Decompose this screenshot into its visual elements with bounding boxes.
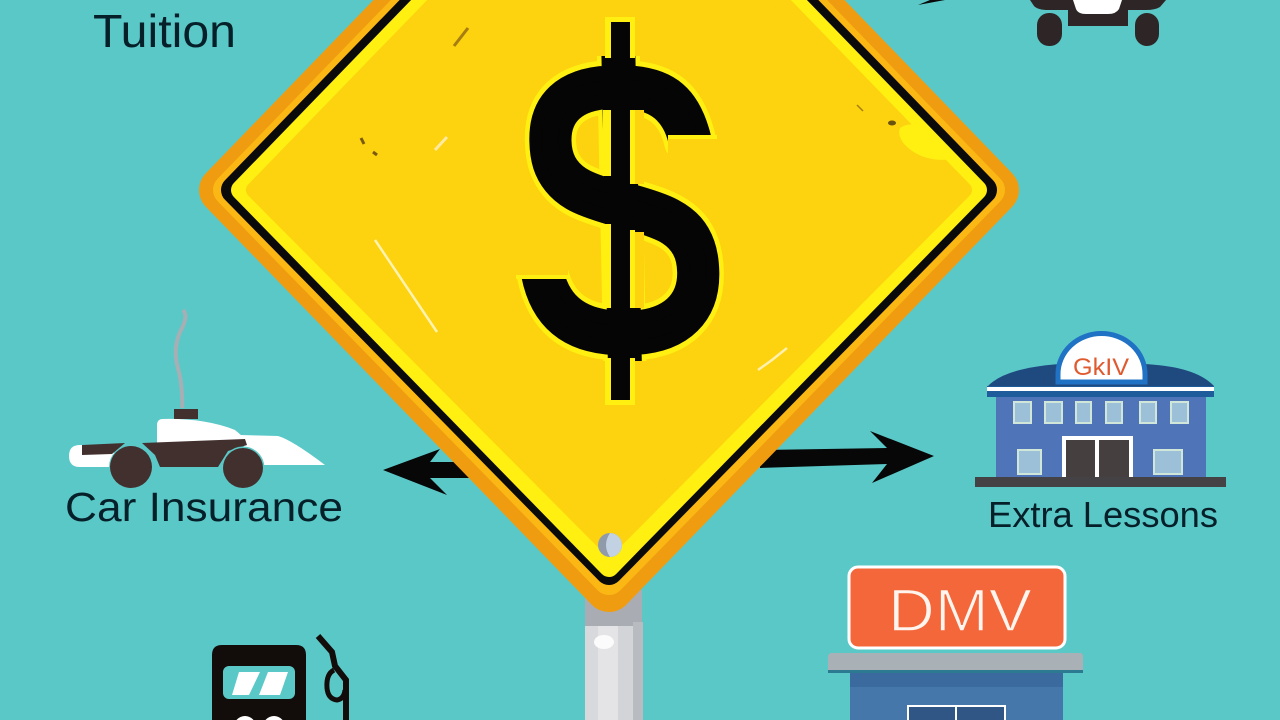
car nose white [240, 435, 325, 465]
sign border: black line [235, 0, 983, 571]
sign face [254, 0, 964, 547]
pump screen [223, 666, 295, 699]
scratches and wear marks [361, 28, 958, 370]
icon: gas pump [212, 636, 346, 720]
base [975, 477, 1226, 487]
building window [908, 706, 1005, 720]
arch sign [1058, 334, 1145, 382]
sign bolt [598, 533, 622, 557]
upper windows [1014, 402, 1188, 474]
building wall [850, 673, 1063, 720]
warning sign with dollar symbol [223, 0, 995, 588]
pump buttons [234, 716, 256, 720]
sign border: thin yellow [229, 0, 989, 579]
dark strip [82, 443, 125, 455]
door [1062, 436, 1133, 478]
pump body [212, 645, 306, 720]
roof [988, 364, 1214, 386]
dark body [142, 439, 247, 467]
cockpit white [157, 419, 248, 443]
eave [987, 386, 1214, 397]
icon: race car [69, 310, 325, 488]
arrow: top right fragment [918, 0, 945, 5]
icon: building with sign [975, 334, 1226, 487]
arrow: right to extra lessons [760, 431, 934, 483]
sign border: orange [223, 0, 995, 588]
DMV sign [849, 567, 1065, 648]
building roof slab [828, 653, 1083, 672]
DMV sign text: DMV [888, 577, 1032, 644]
roof cap [174, 409, 198, 419]
arrow: left to car insurance [383, 449, 480, 495]
wheels [110, 446, 152, 488]
sign post [585, 590, 643, 720]
icon: DMV building [828, 567, 1083, 720]
label: Car Insurance: Car Insurance [65, 484, 343, 530]
label: Tuition: Tuition [93, 5, 236, 57]
antenna [176, 310, 185, 408]
nozzle and hose [318, 636, 346, 720]
car rear white body [69, 445, 114, 467]
sign border: bright yellow [241, 0, 977, 567]
building body [996, 395, 1206, 477]
icon: building with sign: GkIV [1073, 354, 1129, 381]
label: Extra Lessons: Extra Lessons [988, 494, 1218, 535]
icon: top right car [1030, 0, 1166, 46]
